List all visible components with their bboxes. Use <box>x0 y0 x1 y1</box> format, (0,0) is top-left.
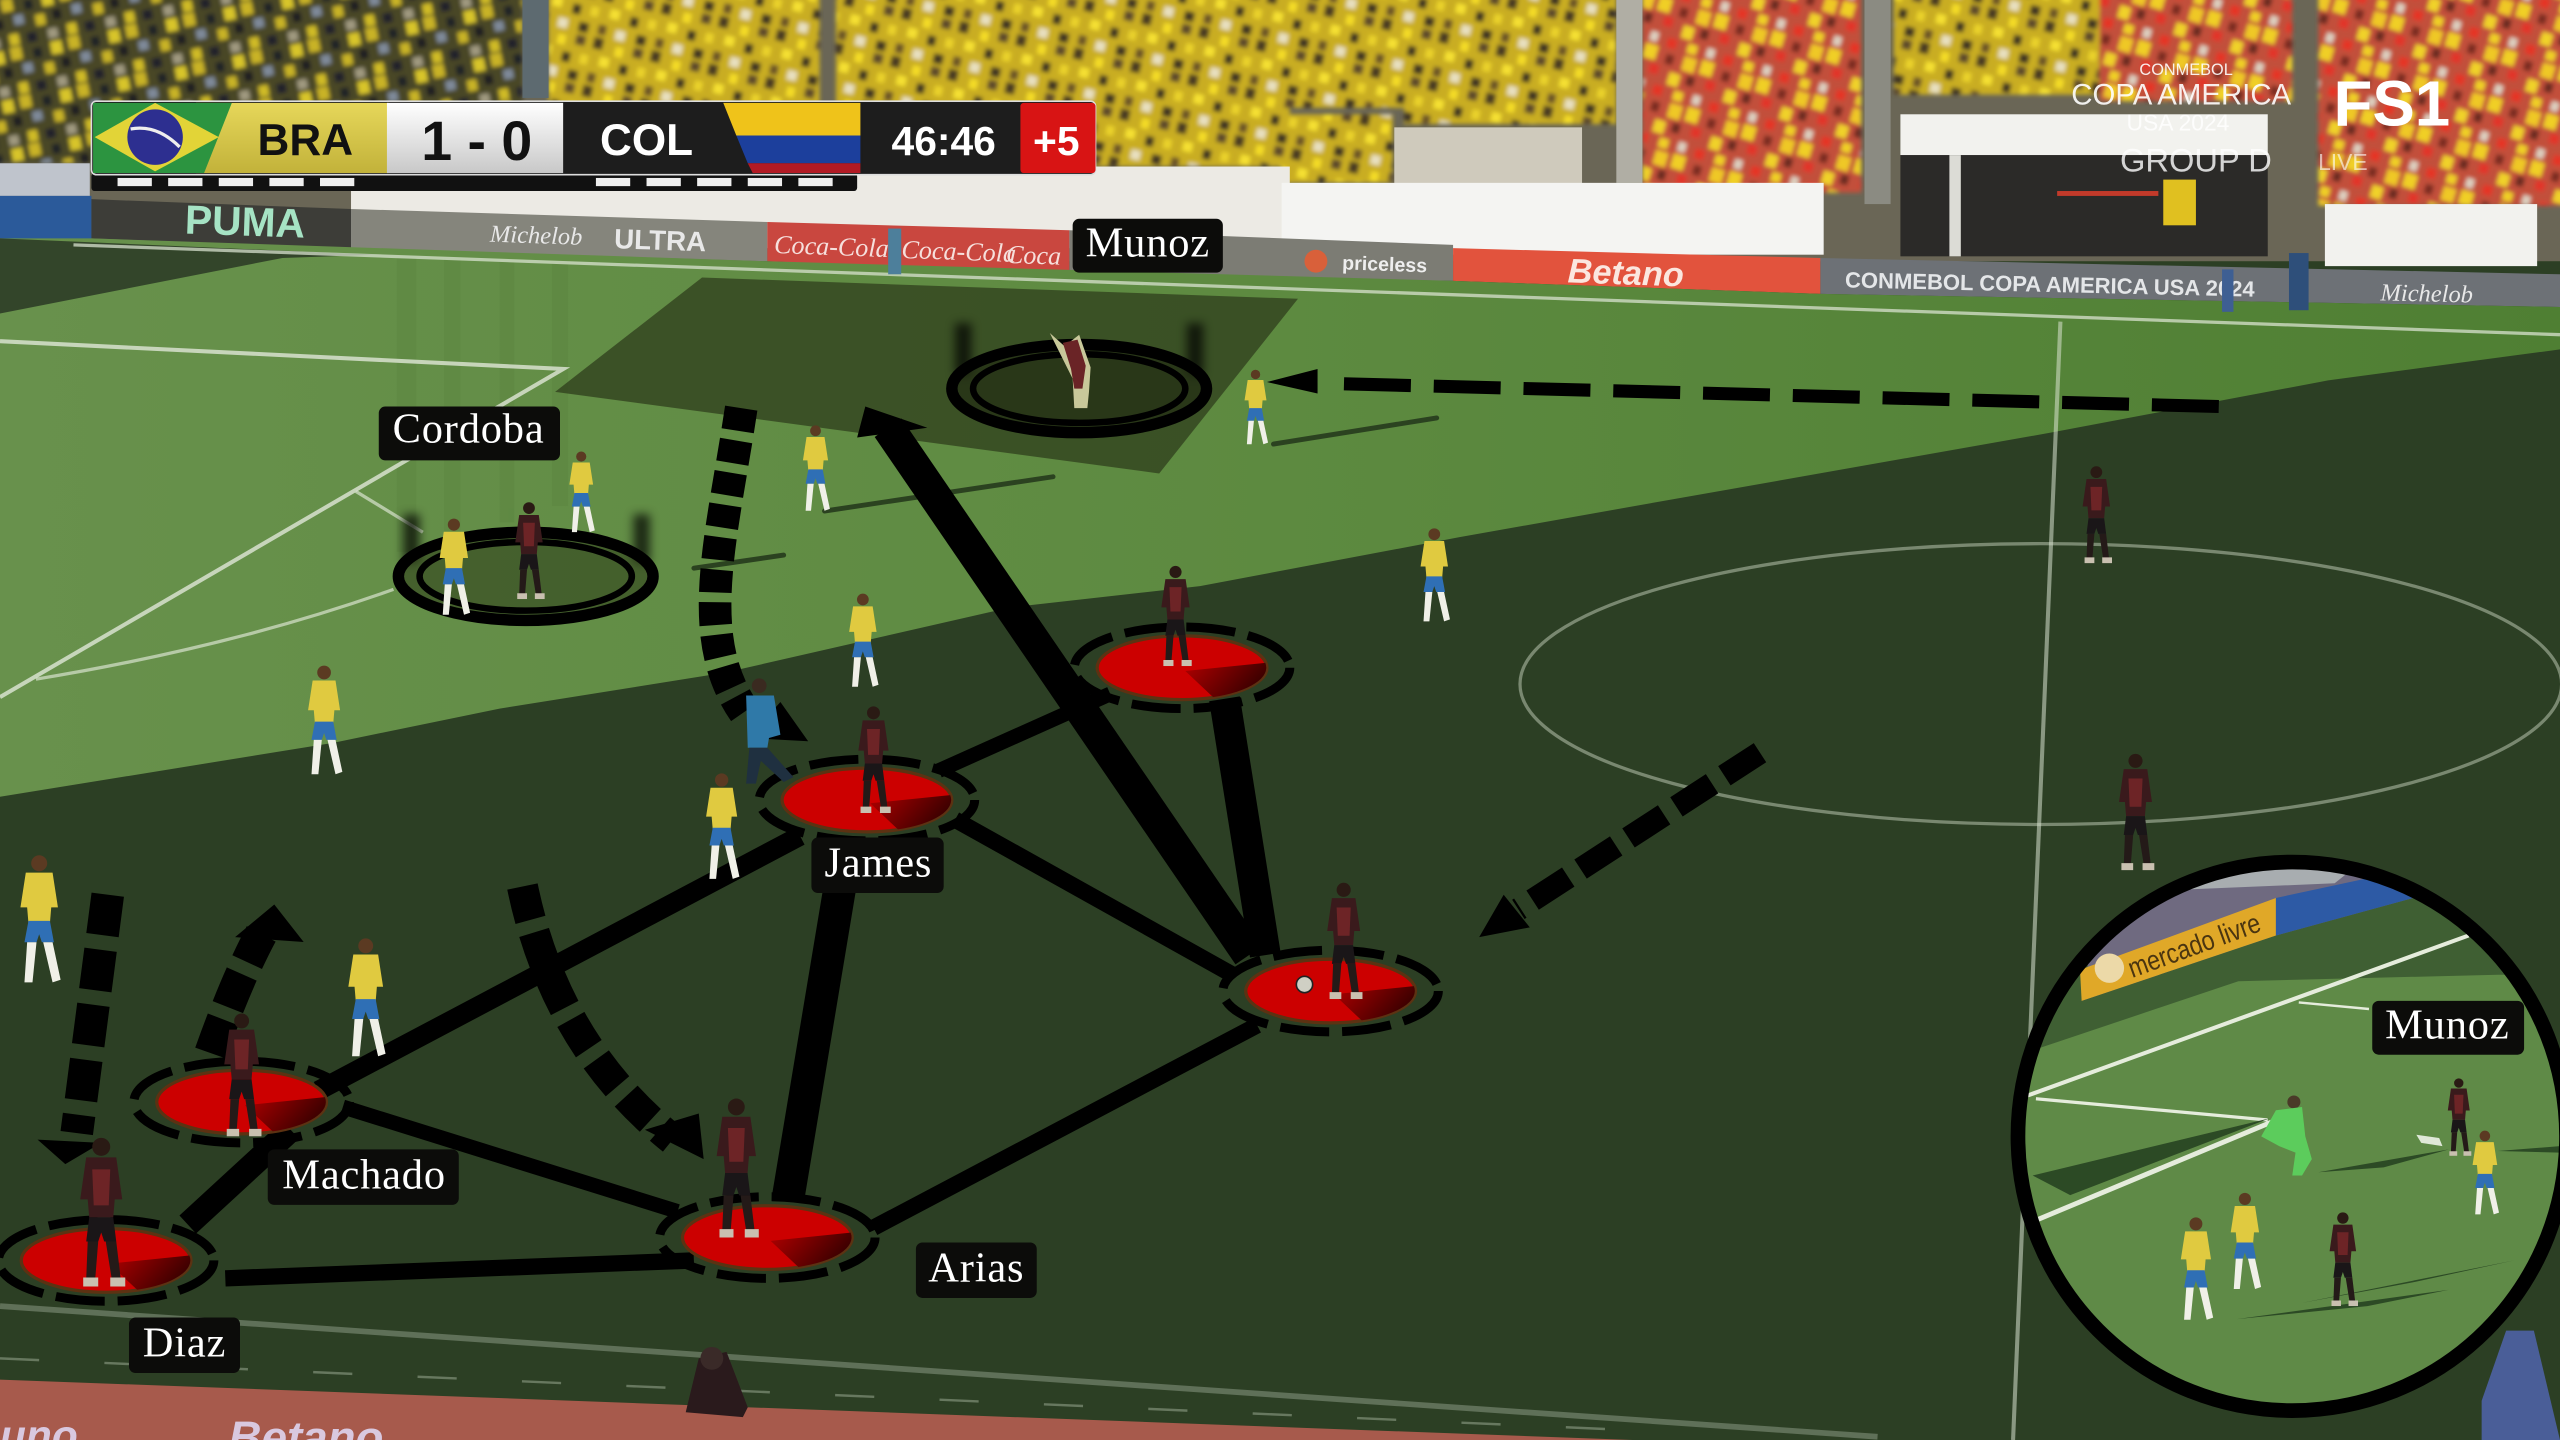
broadcast overlay: Copa America and FS1: CONMEBOL <box>2139 61 2233 79</box>
player marker: James red ring <box>759 759 975 841</box>
board text: sponsors <box>184 196 2473 309</box>
board text: sponsors: Coca <box>1006 240 1062 271</box>
board text: sponsors: priceless <box>1342 252 1428 277</box>
player marker: red ring upper midfielder <box>1074 627 1290 709</box>
board text: sponsors: ULTRA <box>614 223 707 257</box>
advertising boards <box>0 196 2560 309</box>
Brazil players <box>20 370 1450 1056</box>
scoreboard text: COL <box>600 116 693 165</box>
label: Cordoba: Cordoba <box>393 405 545 452</box>
board text: sponsors: PUMA <box>184 196 306 247</box>
bottom sideline advertising board <box>0 1347 1633 1440</box>
scoreboard text: +5 <box>1033 118 1080 164</box>
scoreboard text: 1 - 0 <box>421 110 532 172</box>
broadcast overlay: Copa America and FS1: LIVE <box>2318 149 2368 175</box>
label: Machado: Machado <box>282 1152 446 1199</box>
scoreboard text <box>258 110 1080 172</box>
broadcast overlay: Copa America and FS1: COPA AMERICA <box>2071 78 2292 111</box>
label: Diaz <box>129 1318 240 1373</box>
scoreboard text: 46:46 <box>892 118 996 164</box>
board text: sponsors: Michelob <box>2379 279 2473 309</box>
arrow: dashed curved run to Arias <box>522 887 704 1159</box>
player marker: ball carrier red ring <box>1223 950 1438 1032</box>
pass network: solid black links <box>188 694 1265 1278</box>
player marker: Arias red ring <box>660 1197 875 1278</box>
linesman and touchline staff <box>888 229 2560 1440</box>
label: James <box>811 838 944 893</box>
arrow: dashed run Machado forward <box>211 904 304 1053</box>
broadcast overlay: Copa America and FS1: USA 2024 <box>2127 110 2230 136</box>
arrow: dashed run along the top channel <box>1267 369 2219 407</box>
player marker: Cordoba target ring <box>398 514 653 620</box>
scoreboard text: BRA <box>258 116 353 165</box>
label: Arias <box>916 1242 1037 1298</box>
scoreboard: match-event ticks <box>118 178 833 186</box>
board text: sponsors: Coca-Cola <box>774 230 889 263</box>
label: Diaz: Diaz <box>143 1320 226 1367</box>
board text: sponsors: CONMEBOL COPA AMERICA USA 2024 <box>1845 267 2256 302</box>
player marker: Munoz target ring <box>952 323 1207 433</box>
inset: player shadows <box>2237 1146 2560 1319</box>
player marker: Machado red ring <box>134 1061 349 1143</box>
arrow: dashed run toward ball carrier <box>1479 753 1760 937</box>
broadcast overlay: Copa America and FS1: FS1 <box>2333 69 2450 140</box>
arrow: dashed run toward James <box>715 408 808 741</box>
broadcast overlay: Copa America and FS1: GROUP D <box>2120 141 2272 178</box>
label: James: James <box>824 840 932 887</box>
board text: sponsors: Betano <box>1567 252 1684 294</box>
board text: sponsors: Michelob <box>489 221 583 251</box>
Munoz player sliding in the ring <box>1050 333 1091 408</box>
inset: keeper and players <box>2181 1078 2499 1320</box>
arrow: dashed run Diaz channel <box>38 895 108 1164</box>
referee <box>746 678 793 784</box>
inset: goal-mouth replay circle: mercado livre <box>2124 907 2265 984</box>
inset: Munoz label: Munoz <box>2385 1001 2510 1048</box>
arrow: through ball to Munoz <box>857 407 1249 955</box>
scoreboard <box>91 101 1096 191</box>
highlighted dark zone behind the defence <box>555 278 1298 473</box>
Colombia players <box>80 466 2154 1287</box>
broadcast overlay: Copa America and FS1 <box>2071 61 2450 178</box>
label: Munoz: Munoz <box>1086 219 1210 266</box>
player marker: Diaz red ring <box>0 1220 214 1301</box>
label: Arias: Arias <box>928 1245 1024 1292</box>
inset: goal-mouth replay circle <box>2011 856 2560 1419</box>
board text: sponsors: Coca-Cola <box>901 235 1017 268</box>
player shadows <box>694 418 1437 568</box>
stadium stands background <box>0 0 2560 266</box>
